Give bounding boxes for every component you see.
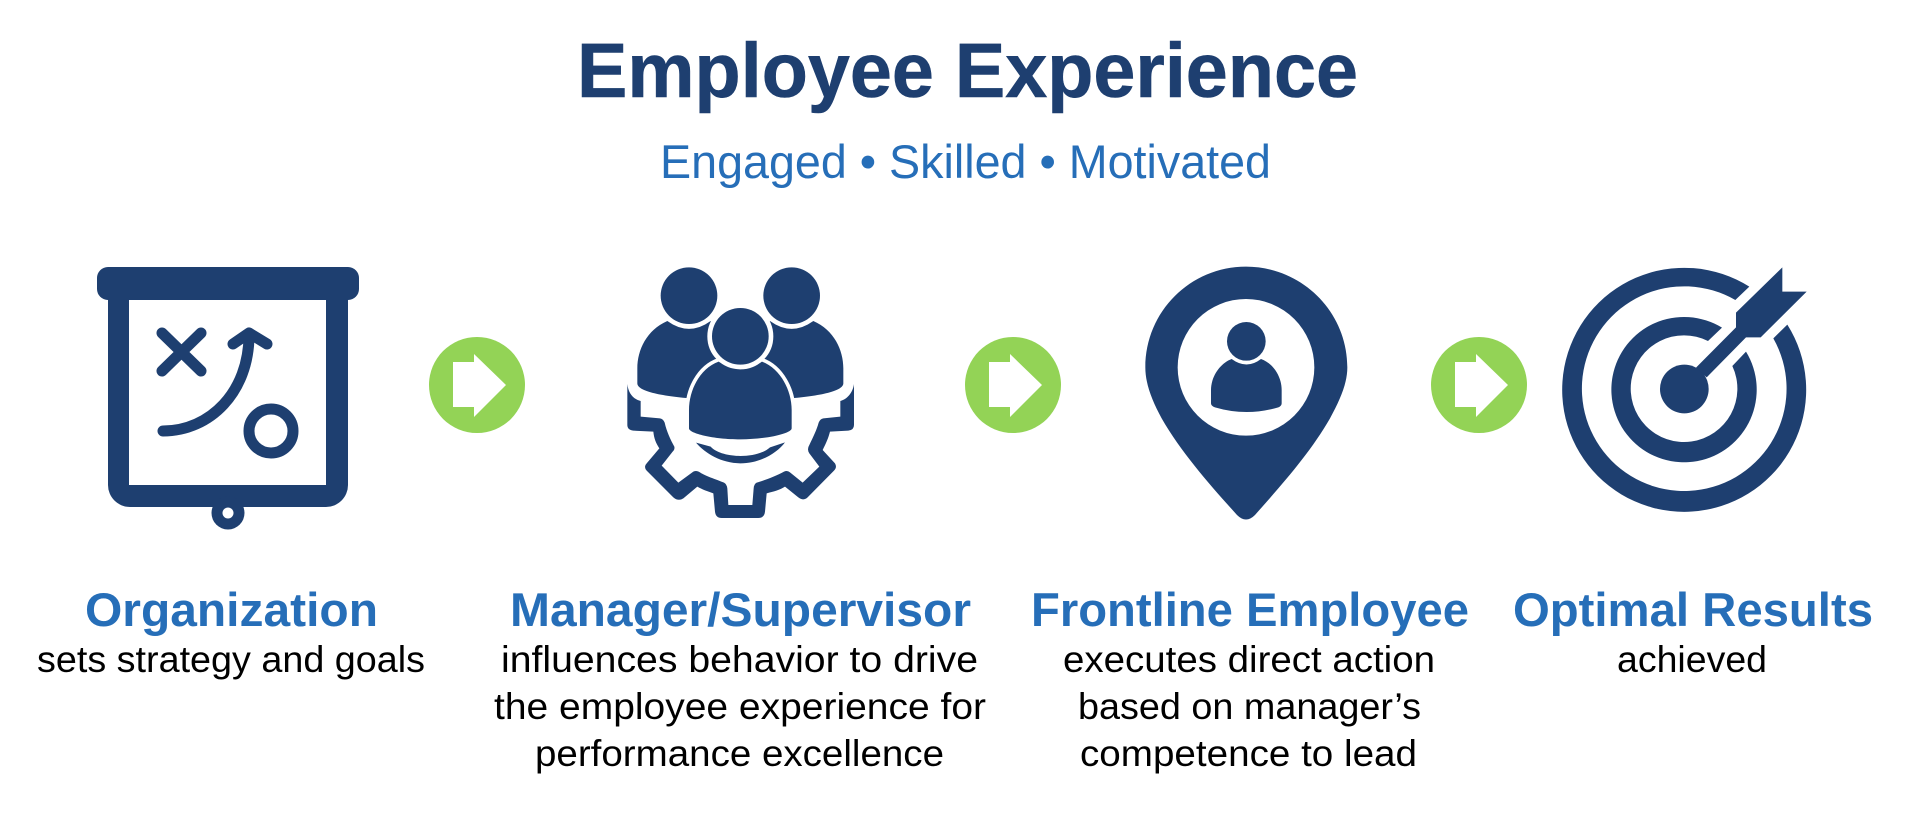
description: manager supervisor xyxy=(494,639,986,774)
description: manager supervisor: influences behavior to drive xyxy=(501,639,978,680)
heading: optimal results: Optimal Results xyxy=(1513,583,1873,636)
subtitle: Engaged • Skilled • Motivated xyxy=(660,135,1271,188)
text block: optimal results xyxy=(1513,583,1873,680)
heading: organization: Organization xyxy=(85,583,378,636)
text block: frontline employee xyxy=(1031,583,1469,774)
icon: strategy presentation board xyxy=(97,267,359,530)
description: frontline employee xyxy=(1063,639,1435,774)
text block: manager supervisor xyxy=(494,583,986,774)
arrow: manager to frontline xyxy=(965,337,1061,433)
arrow: frontline to results xyxy=(1431,337,1527,433)
description: organization: sets strategy and goals xyxy=(37,639,425,680)
icon: team with gear xyxy=(627,267,854,518)
description: manager supervisor: performance excellence xyxy=(535,733,944,774)
icon: location pin with person xyxy=(1145,267,1347,519)
heading: manager supervisor: Manager/Supervisor xyxy=(510,583,971,636)
arrow: organization to manager xyxy=(429,337,525,433)
description: frontline employee: executes direct action xyxy=(1063,639,1435,680)
description: frontline employee: based on manager’s xyxy=(1078,686,1421,727)
description: manager supervisor: the employee experience for xyxy=(494,686,986,727)
description: optimal results: achieved xyxy=(1617,639,1767,680)
title: Employee Experience xyxy=(577,28,1358,114)
text block: organization xyxy=(37,583,425,680)
heading: frontline employee: Frontline Employee xyxy=(1031,583,1469,636)
description: frontline employee: competence to lead xyxy=(1080,733,1417,774)
icon: target with arrow xyxy=(1562,267,1807,512)
